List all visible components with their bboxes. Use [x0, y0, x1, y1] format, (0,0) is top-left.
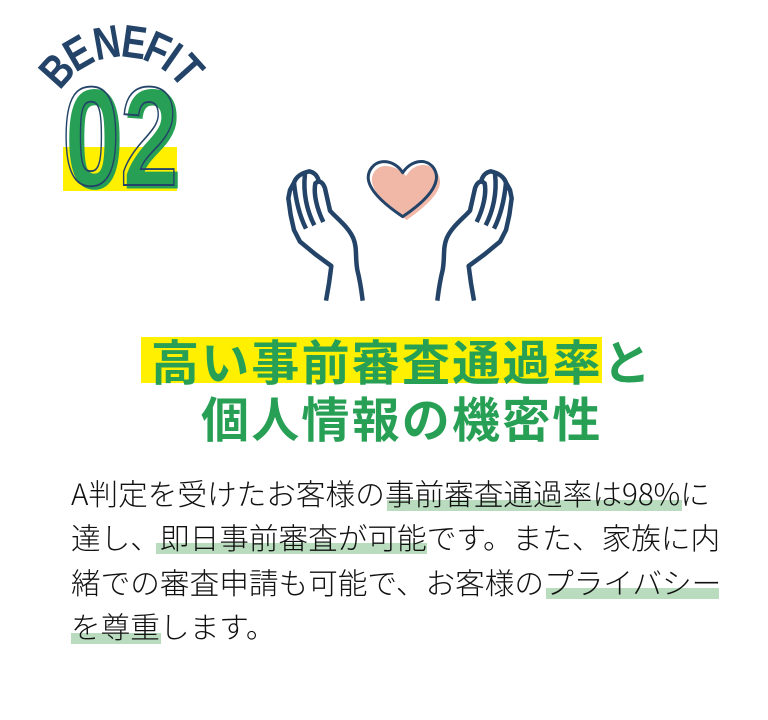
- heading line 1: 高い事前審査通過率と: [151, 324, 653, 394]
- body line 4: を尊重します。: [71, 604, 276, 647]
- underline: 即日事前審査が可能: [156, 543, 427, 554]
- arched BENEFIT label: N: [89, 14, 124, 70]
- heading line 2: 個人情報の機密性: [201, 381, 603, 451]
- left hand: [288, 171, 363, 301]
- right hand: [437, 171, 512, 301]
- heading yellow highlight: [141, 337, 602, 383]
- arched BENEFIT label: B: [28, 43, 85, 97]
- icon: hands holding heart: [286, 160, 514, 301]
- badge: BENEFIT 02: [28, 14, 214, 200]
- body line 3: 緒での審査申請も可能で、お客様のプライバシー: [71, 560, 721, 603]
- body text: [71, 471, 721, 647]
- arched BENEFIT label: E: [54, 24, 102, 81]
- underline: 事前審査通過率は98%: [387, 500, 682, 511]
- arched BENEFIT label: I: [153, 33, 192, 81]
- heading: [141, 324, 653, 451]
- underline: を尊重: [71, 633, 161, 644]
- heart pink fill: [372, 165, 440, 220]
- arched BENEFIT label: T: [161, 44, 214, 96]
- body line 2: 達し、即日事前審査が可能です。また、家族に内: [71, 515, 720, 558]
- arched BENEFIT label: F: [137, 20, 179, 77]
- body line 1: A判定を受けたお客様の事前審査通過率は98%に: [71, 471, 710, 514]
- underline: プライバシー: [546, 588, 719, 599]
- heart outline: [368, 161, 436, 217]
- arched BENEFIT label: [28, 14, 214, 97]
- yellow band behind number: [63, 147, 177, 191]
- arched BENEFIT label: E: [118, 14, 150, 69]
